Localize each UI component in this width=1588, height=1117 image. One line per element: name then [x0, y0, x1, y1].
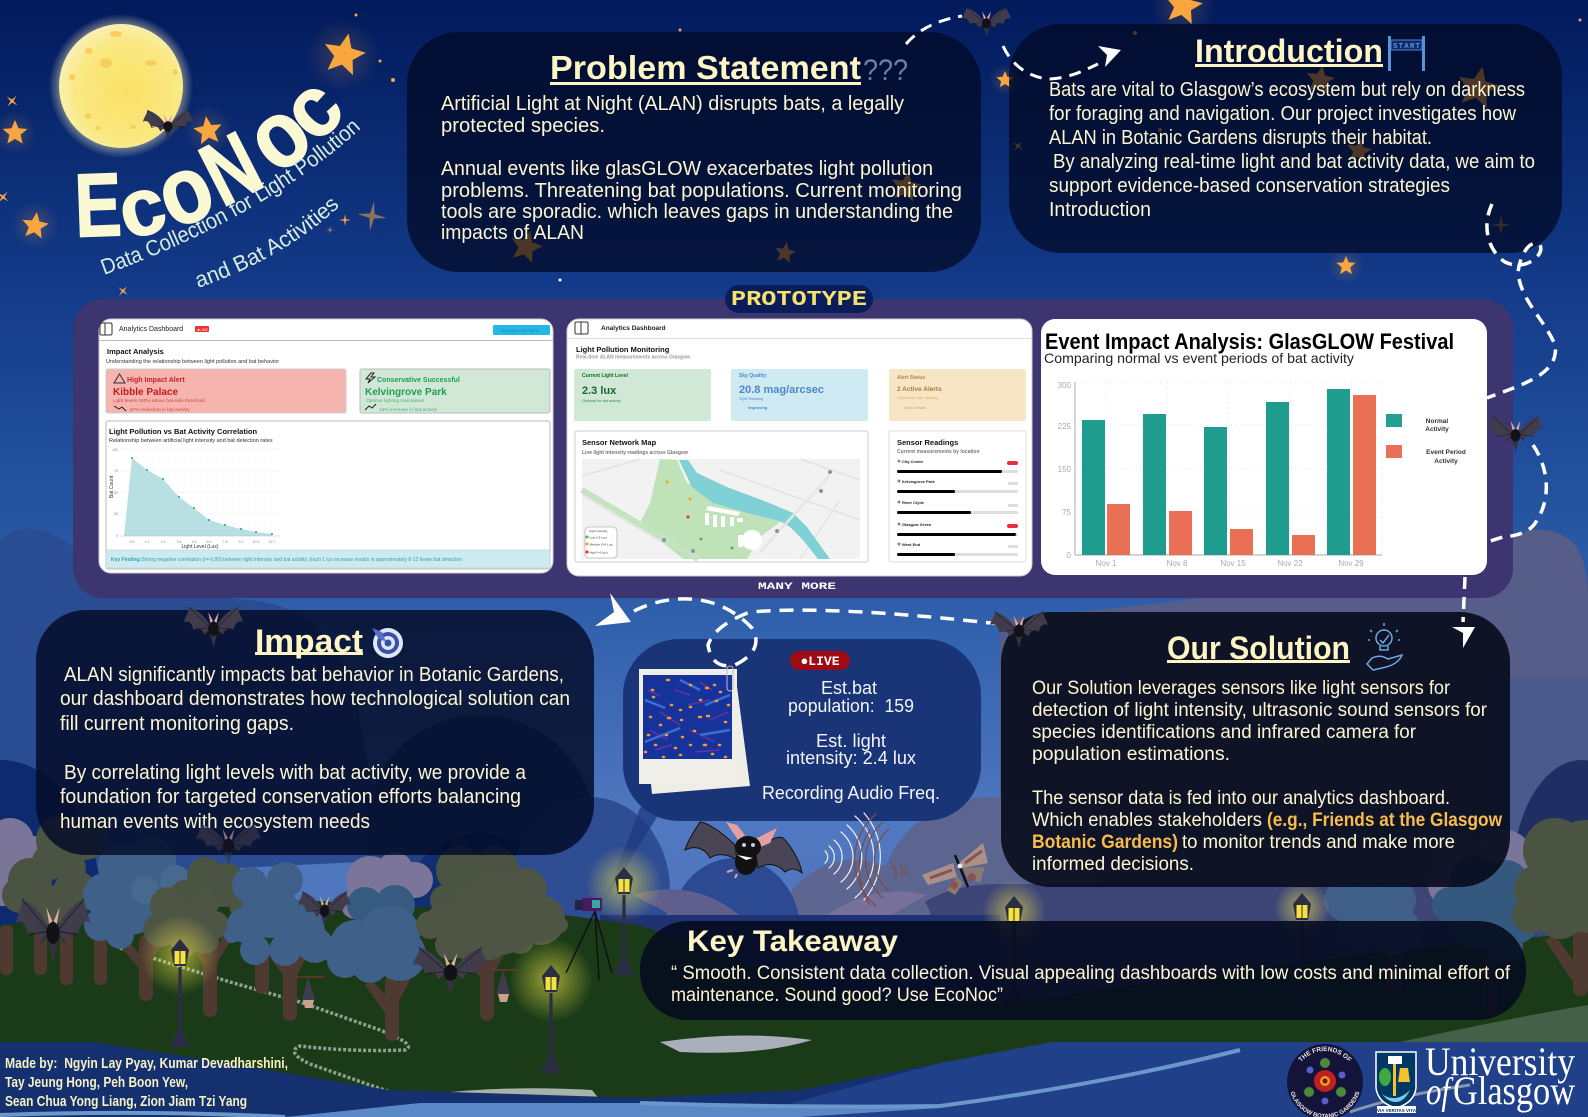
sensor readings list: City Centre: [902, 459, 924, 464]
correlation chart: 3.4: [177, 540, 181, 544]
impact text: [60, 664, 570, 833]
logo: University of Glasgow wordmark: of: [1426, 1071, 1454, 1113]
correlation chart: 0: [116, 534, 118, 538]
dashboard card: event impact bar chart: Event Period: [1426, 449, 1466, 456]
takeaway text: “ Smooth. Consistent data collection. Visual appealing dashboards with low costs and minimal effort of: [671, 963, 1511, 984]
park ground: [0, 900, 1588, 1117]
dashboard card: event impact bar chart: 300: [1058, 381, 1072, 390]
solution text: population estimations.: [1032, 744, 1230, 765]
correlation chart: 25: [114, 512, 118, 516]
correlation chart: Relationship between artificial light intensity and bat detection rates: [109, 438, 273, 444]
camera beam toward live panel: [605, 793, 672, 900]
metric tile: sky quality: [731, 369, 868, 421]
background hills: [0, 529, 1588, 1083]
introduction text: Introduction: [1049, 199, 1151, 221]
impact text: human events with ecosystem needs: [60, 811, 370, 833]
sensor readings list: Kelvingrove Park: [902, 479, 935, 484]
solution text: [1032, 678, 1502, 875]
introduction text: By analyzing real-time light and bat activity data, we aim to: [1053, 151, 1535, 173]
introduction text: Bats are vital to Glasgow’s ecosystem but rely on darkness: [1049, 79, 1525, 101]
correlation chart: 0.5: [130, 540, 134, 544]
title: EcoNoc curved wordmark: N: [186, 113, 277, 226]
correlation chart: 9.1: [239, 540, 243, 544]
sensor readings list: West End: [902, 542, 921, 547]
correlation chart: Light Pollution vs Bat Activity Correlation: [109, 427, 257, 436]
correlation chart: 12.7: [269, 540, 275, 544]
sensor readings list: Glasgow Green: [902, 522, 932, 527]
metric tile: sky quality: SQM Reading: [739, 397, 763, 401]
title: EcoNoc curved wordmark: o: [225, 78, 330, 192]
dashboard card: event impact bar chart: Event Impact Analysis: GlasGLOW Festival: [1045, 329, 1454, 354]
metric tile: alert status: View Details: [904, 405, 926, 410]
impact text: ALAN significantly impacts bat behavior in Botanic Gardens,: [64, 664, 564, 686]
metric tile: light level: [574, 369, 711, 421]
dashboard card: event impact bar chart: 75: [1062, 508, 1072, 517]
dashboard card: event impact bar chart: Nov 1: [1096, 559, 1117, 568]
success card: Kelvingrove Park: Optimal lighting maintained: [366, 398, 424, 404]
solution text: to monitor trends and make more: [1182, 832, 1455, 853]
panel: impact: [36, 610, 594, 855]
live readings text: Recording Audio Freq.: [762, 783, 940, 803]
sensor network map: Sensor Network Map: [582, 438, 657, 447]
dashboard card: light pollution monitoring: [567, 319, 1032, 576]
correlation chart: 7.8: [223, 540, 227, 544]
heading: our solution: Our Solution: [1167, 630, 1350, 666]
takeaway text: maintenance. Sound good? Use EcoNoc”: [671, 985, 1003, 1006]
metric tile: sky quality: 20.8 mag/arcsec: [739, 384, 824, 396]
stars scattered across the sky: [0, 0, 1582, 323]
dashboard card: event impact bar chart: Nov 29: [1338, 559, 1364, 568]
icon: cute bat: [685, 822, 802, 878]
sensor readings list: Current measurements by location: [897, 449, 980, 455]
tree bat right: [413, 947, 488, 995]
success card: Kelvingrove Park: 15% increase in bat activity: [379, 407, 438, 413]
dashboard card: event impact bar chart: 0: [1067, 551, 1072, 560]
dashboard card: event impact bar chart: Nov 8: [1167, 559, 1188, 568]
introduction text: support evidence-based conservation strategies: [1049, 175, 1450, 197]
dashboard card: event impact bar chart: Nov 15: [1220, 559, 1246, 568]
correlation chart: 4.5: [192, 540, 196, 544]
live badge: [790, 651, 850, 670]
icon: start flag: [1388, 36, 1425, 71]
polaroid spectrogram photos: [639, 666, 750, 794]
title: EcoNoc curved wordmark: o: [141, 132, 227, 249]
logo: Friends of Glasgow Botanic Gardens: [1287, 1044, 1363, 1117]
dashboard card: light pollution monitoring: Light Pollution Monitoring: [576, 345, 670, 354]
impact text: foundation for targeted conservation efforts balancing: [60, 786, 521, 808]
solution text: Which enables stakeholders: [1032, 810, 1262, 831]
subtitle: curved tagline: and Bat Activities: [196, 199, 338, 287]
introduction text: ALAN in Botanic Gardens disrupts their habitat.: [1049, 127, 1432, 149]
dashboard card: impact analysis: Analytics Dashboard: [119, 326, 183, 333]
heading: introduction: Introduction: [1195, 33, 1383, 69]
icon: sound waves: [825, 813, 906, 906]
dashed arrow: problem to introduction: [906, 16, 1121, 79]
live readings text: [762, 678, 940, 803]
hanging bat one: [296, 977, 325, 1008]
dashboard card: event impact bar chart: Comparing normal vs event periods of bat activity: [1044, 350, 1354, 366]
panel: key takeaway: [640, 921, 1526, 1020]
sensor network map: Low (<3 Lux): [590, 536, 607, 540]
metric tile: sky quality: Improving: [748, 405, 768, 410]
problem statement text: Artificial Light at Night (ALAN) disrupts bats, a legally: [441, 93, 904, 115]
correlation chart: 6.0: [207, 540, 211, 544]
correlation chart: [106, 421, 550, 569]
correlation chart: Bat Count: [109, 475, 115, 498]
dashboard card: impact analysis: Glasgow, Scotland: [501, 328, 539, 333]
credits: [5, 1056, 288, 1110]
prototype label pill: [725, 285, 873, 313]
icon: moth: [922, 843, 988, 895]
tree bat centre: [298, 891, 351, 928]
problem statement text: problems. Threatening bat populations. Current monitoring: [441, 180, 962, 202]
problem statement text: [441, 93, 962, 244]
dashed arrow: solution to impact: [595, 593, 1000, 666]
solution text: Botanic Gardens): [1032, 832, 1178, 853]
solution text: species identifications and infrared camera for: [1032, 722, 1417, 743]
icon: question marks: ???: [863, 54, 908, 87]
solution text: The sensor data is fed into our analytics dashboard.: [1032, 788, 1450, 809]
correlation chart: 75: [114, 469, 118, 473]
trees: right group: [1324, 818, 1588, 1016]
logo: Friends of Glasgow Botanic Gardens: THE FRIENDS OF: [1298, 1046, 1352, 1061]
trees: left group: [0, 816, 568, 1041]
title: EcoNoc curved wordmark: c: [262, 59, 361, 158]
metric tile: alert status: Alert Status: [897, 375, 925, 381]
river along bottom edge: [0, 1042, 1588, 1117]
dashboard card: event impact bar chart: 150: [1058, 465, 1072, 474]
correlation chart: 10.5: [253, 540, 259, 544]
panel: our solution: [1001, 612, 1510, 887]
heading: problem statement: Problem Statement: [550, 49, 861, 86]
bat behind impact panel edge: [196, 824, 261, 865]
dashboard card: event impact bar chart: Activity: [1425, 426, 1449, 433]
bat in front of moon: [143, 110, 193, 141]
sensor network map: Light Intensity: [589, 529, 608, 533]
takeaway text: [671, 963, 1511, 1006]
impact text: fill current monitoring gaps.: [60, 713, 294, 735]
sensor network map: Medium (3-4 Lux): [590, 542, 613, 546]
success card: Kelvingrove Park: Conservative Successful: [377, 377, 460, 384]
metric tile: alert status: [889, 369, 1026, 421]
solution text: detection of light intensity, ultrasonic sound sensors for: [1032, 700, 1488, 721]
dashboard card: impact analysis: ●LIVE: [197, 327, 208, 332]
dashboard card: impact analysis: Understanding the relationship between light pollution and bat behavior: [106, 359, 279, 365]
credits: Sean Chua Yong Liang, Zion Jiam Tzi Yang: [5, 1094, 247, 1110]
impact text: our dashboard demonstrates how technological solution can: [60, 688, 570, 710]
metric tile: light level: Optional for bat activity: [582, 399, 621, 403]
many more label: MANY MORE: [758, 581, 836, 593]
correlation chart: 100: [112, 448, 118, 452]
introduction text: [1049, 79, 1535, 221]
metric tile: alert status: 2 Active Alerts: [897, 386, 942, 393]
alert card: Kibble Palace: Kibble Palace: [113, 387, 178, 398]
dashboard card: impact analysis: Impact Analysis: [107, 347, 164, 356]
heading: key takeaway: Key Takeaway: [687, 925, 898, 958]
heading: impact: Impact: [255, 623, 363, 659]
moon: [49, 14, 193, 158]
icon: bulb in hand: [1367, 623, 1402, 670]
metric tile: light level: 2.3 lux: [582, 385, 617, 397]
credits: Tay Jeung Hong, Peh Boon Yew,: [5, 1075, 188, 1091]
dashboard card: light pollution monitoring: Analytics Dashboard: [601, 325, 666, 332]
panel: introduction: [1009, 24, 1562, 253]
solution text: Our Solution leverages sensors like light sensors for: [1032, 678, 1451, 699]
live readings text: intensity: 2.4 lux: [786, 748, 916, 768]
path highlight patches: [432, 1005, 1588, 1100]
bat on top edge: [962, 8, 1011, 37]
logo: University of Glasgow shield: [1376, 1052, 1417, 1113]
street lamps with glow: [140, 846, 1330, 1073]
panel: live sensor readout: [623, 639, 981, 821]
bat above impact panel: [184, 607, 243, 648]
success card: Kelvingrove Park: [360, 369, 550, 413]
problem statement text: Annual events like glasGLOW exacerbates light pollution: [441, 158, 933, 180]
solution text: (e.g., Friends at the Glasgow: [1267, 810, 1502, 831]
credits: Made by: Ngyin Lay Pyay, Kumar Devadharshini,: [5, 1056, 288, 1072]
problem statement text: tools are sporadic. which leaves gaps in understanding the: [441, 201, 953, 223]
icon: start flag: START: [1393, 43, 1420, 51]
panel: problem statement: [407, 32, 981, 272]
sensor network map: Live light intensity readings across Glasgow: [582, 450, 688, 456]
introduction text: for foraging and navigation. Our project investigates how: [1049, 103, 1517, 125]
bat beside prototype panel: [1488, 416, 1543, 452]
alert card: Kibble Palace: High Impact Alert: [127, 377, 185, 384]
live readings text: Est.bat: [821, 678, 877, 698]
subtitle: curved tagline: Data Collection for Light Pollution: [100, 122, 360, 274]
alert card: Kibble Palace: [106, 369, 346, 413]
logo: University of Glasgow wordmark: [1425, 1039, 1575, 1113]
sensor network map: High (>4 Lux): [590, 550, 608, 554]
title: EcoNoc curved wordmark: E: [73, 155, 123, 257]
impact text: By correlating light levels with bat activity, we provide a: [64, 762, 527, 784]
dashboard card: event impact bar chart: [1041, 319, 1487, 575]
alert card: Kibble Palace: 67% reduction in bat activity: [130, 407, 190, 413]
dashboard card: event impact bar chart: Activity: [1434, 458, 1458, 465]
metric tile: sky quality: Sky Quality: [739, 373, 766, 379]
winding park path: [120, 948, 408, 1092]
correlation chart: 1.2: [145, 540, 149, 544]
problem statement text: impacts of ALAN: [441, 222, 584, 244]
tree bat left: [16, 899, 90, 963]
dashboard card: event impact bar chart: Nov 22: [1277, 559, 1303, 568]
title: EcoNoc curved wordmark: c: [108, 158, 175, 257]
correlation chart: Light Level (Lux): [182, 544, 219, 550]
dashboard card: event impact bar chart: Normal: [1426, 418, 1448, 425]
dashed arrow: introduction to solution: [1452, 204, 1555, 648]
correlation chart: 2.3: [161, 540, 165, 544]
bat above solution panel: [990, 611, 1048, 648]
problem statement text: protected species.: [441, 115, 605, 137]
alert card: Kibble Palace: Light levels 340% above bat-safe threshold: [113, 398, 205, 404]
live readings text: Est. light: [816, 731, 886, 751]
live badge: ●LIVE: [800, 654, 840, 669]
icon: target: [372, 628, 403, 658]
correlation chart: Key Finding:Strong negative correlation (r=-0.89) between light intensity and bat activity. Each 1 lux increase results in approximately 8-12 fewer bat detection: [111, 557, 462, 563]
dashboard card: light pollution monitoring: Real-time ALAN measurements across Glasgow: [576, 354, 690, 360]
metric tile: light level: Current Light Level: [582, 373, 628, 379]
correlation chart: 50: [114, 491, 118, 495]
dashboard card: event impact bar chart: 225: [1058, 422, 1072, 431]
sensor network map: [575, 431, 868, 562]
camera on tripod: [566, 898, 612, 980]
sensor readings list: [889, 431, 1026, 562]
dashboard card: impact analysis: [99, 319, 553, 573]
hanging bat two: [492, 970, 518, 1002]
sensor readings list: Sensor Readings: [897, 438, 958, 447]
success card: Kelvingrove Park: Kelvingrove Park: [365, 387, 447, 398]
prototype label pill: PROTOTYPE: [731, 289, 867, 312]
sensor readings list: River Clyde: [902, 500, 925, 505]
live readings text: population: 159: [788, 696, 914, 716]
title: EcoNoc curved wordmark: [73, 59, 361, 257]
logo: University of Glasgow shield: VIA VERITAS VITA: [1377, 1108, 1417, 1113]
metric tile: alert status: City center high intensity: [897, 396, 938, 400]
panel: prototype: [73, 285, 1513, 598]
solution text: informed decisions.: [1032, 854, 1194, 875]
